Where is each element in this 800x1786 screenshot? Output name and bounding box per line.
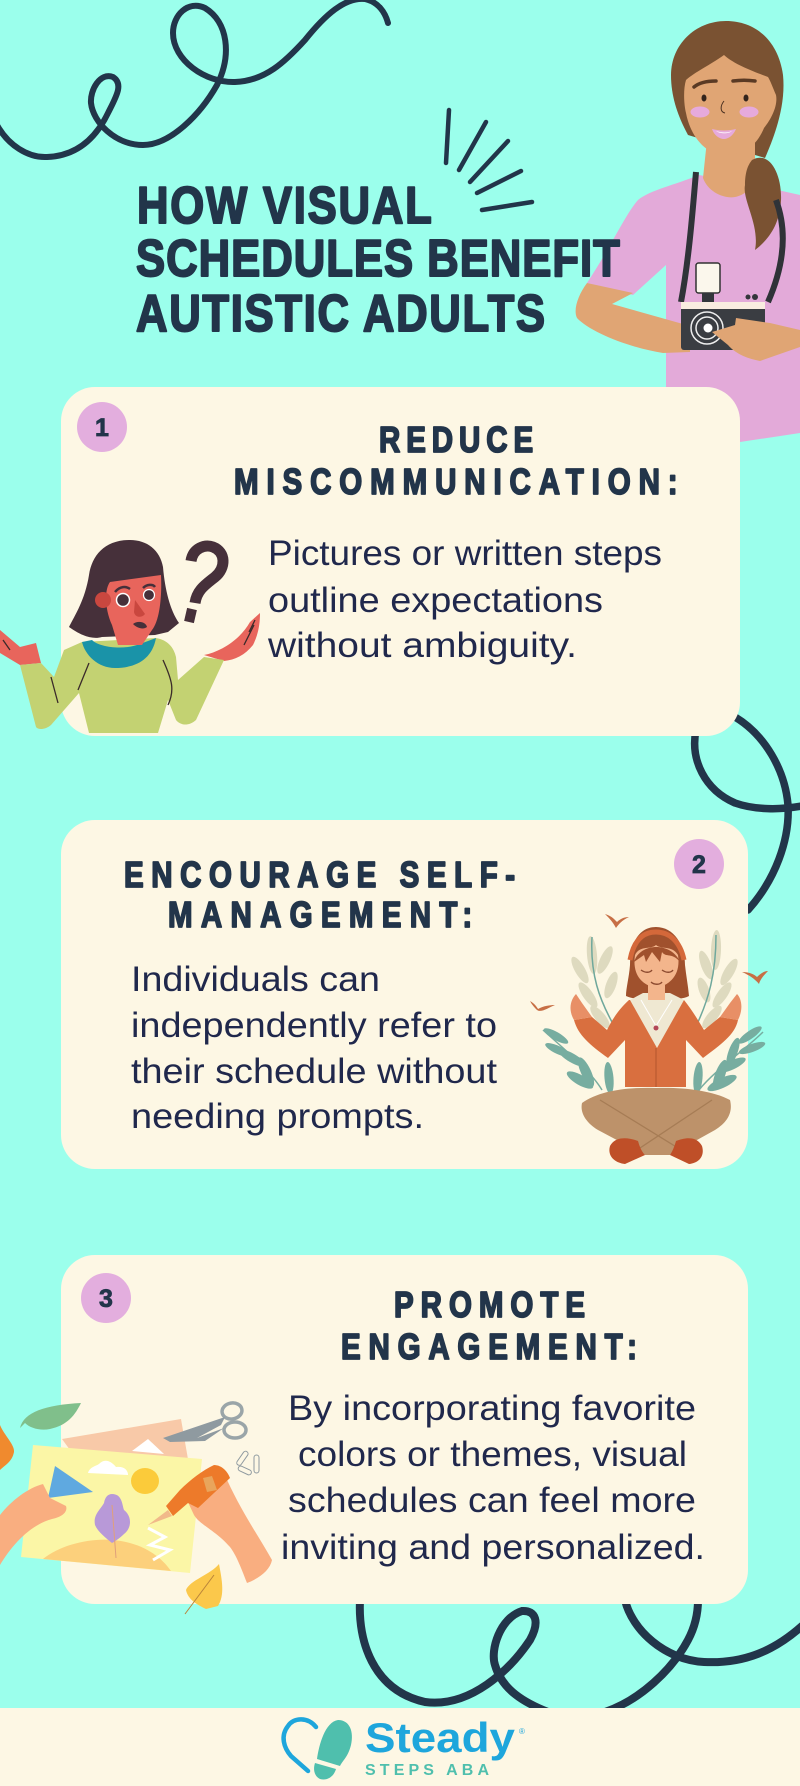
neck and face: [106, 575, 161, 645]
camera body: [681, 302, 765, 350]
face: [634, 945, 678, 988]
purple leaf: [95, 1494, 130, 1543]
logo tagline: STEPS ABA: [365, 1762, 489, 1779]
registered mark: ®: [519, 1727, 525, 1736]
title: AUTISTIC ADULTS: [136, 286, 545, 343]
hair back: [671, 21, 784, 158]
right hand: [186, 1473, 272, 1583]
hair: [69, 540, 179, 638]
heading: [234, 419, 678, 502]
number badge 3: 3: [99, 1285, 113, 1313]
left hand: [0, 1484, 66, 1565]
cloud: [88, 1461, 128, 1475]
blue triangle: [48, 1466, 93, 1498]
heading: MANAGEMENT:: [168, 894, 472, 935]
decorative squiggle: bottom: [360, 1600, 800, 1712]
body text: [281, 1389, 705, 1567]
illustration: hands crafting a collage: [0, 1401, 272, 1614]
yellow paper: [21, 1445, 202, 1573]
nose and mouth: [134, 600, 145, 617]
cardigan and arms: [574, 1000, 738, 1087]
body text: schedules can feel more: [288, 1481, 696, 1520]
teal leaves: [542, 1024, 767, 1094]
necklace: [641, 1000, 672, 1026]
illustration: woman with camera: [576, 21, 800, 442]
paperclips: [236, 1450, 259, 1476]
heading: PROMOTE: [394, 1284, 585, 1325]
beige leaves right: [695, 930, 741, 1031]
straps: [681, 172, 783, 302]
trousers: [582, 1088, 731, 1155]
hill: [43, 1540, 171, 1571]
neck: [703, 140, 755, 197]
body text: their schedule without: [131, 1052, 497, 1091]
logo wordmark: Steady: [365, 1714, 516, 1761]
panel: reduce miscommunication: [61, 387, 740, 736]
body text: inviting and personalized.: [281, 1528, 705, 1567]
left arm: [576, 283, 690, 353]
hands: [570, 994, 741, 1020]
heading: [124, 854, 515, 935]
number badge 3: [81, 1273, 131, 1323]
scissors: [221, 1401, 246, 1438]
heading: [341, 1284, 637, 1367]
green leaf: [20, 1403, 81, 1430]
body text: [267, 534, 662, 665]
footer band: [0, 1708, 800, 1786]
panel: encourage self-management: [61, 820, 748, 1169]
logo: heart and footprint: [284, 1719, 352, 1779]
sun: [131, 1468, 159, 1494]
headband: [630, 932, 684, 960]
orange leaf: [0, 1425, 14, 1470]
title: [136, 178, 620, 343]
number badge 1: 1: [95, 414, 109, 442]
blouse: [630, 993, 684, 1048]
hair: [626, 927, 689, 999]
face: [684, 55, 776, 155]
heading: ENGAGEMENT:: [341, 1326, 637, 1367]
birds: [605, 914, 629, 928]
body text: Individuals can: [131, 960, 380, 999]
number badge 2: [674, 839, 724, 889]
shirt: [587, 175, 800, 442]
heading: MISCOMMUNICATION:: [234, 461, 678, 502]
illustration: meditating woman: [530, 914, 768, 1164]
facial features: [641, 970, 673, 984]
cardigan line: [655, 1048, 657, 1087]
cheeks: [690, 106, 710, 118]
body text: outline expectations: [268, 581, 603, 620]
number badge 1: [77, 402, 127, 452]
sleeve lines: [51, 660, 172, 705]
body text: [131, 960, 497, 1136]
body text: colors or themes, visual: [298, 1435, 687, 1474]
body text: independently refer to: [131, 1006, 497, 1045]
illustration: confused woman shrugging: [0, 540, 260, 733]
title: SCHEDULES BENEFIT: [136, 231, 620, 288]
beige leaves left: [568, 936, 620, 1031]
icon: burst lines: [446, 110, 532, 210]
heading: REDUCE: [379, 419, 533, 460]
mouth: [712, 129, 736, 139]
squiggle of glue: [148, 1528, 170, 1560]
body text: Pictures or written steps: [268, 534, 662, 573]
body text: needing prompts.: [131, 1097, 424, 1136]
braid: [745, 158, 781, 250]
eyes: [116, 594, 130, 606]
sweater: [20, 638, 224, 733]
yellow leaf: [186, 1564, 222, 1609]
bangs: [634, 947, 680, 962]
shoes: [609, 1138, 645, 1164]
collar: [82, 638, 156, 668]
body text: without ambiguity.: [267, 626, 577, 665]
title: HOW VISUAL: [137, 178, 432, 235]
question mark: [189, 546, 223, 622]
peach paper: [62, 1419, 189, 1465]
right hand: [712, 318, 800, 361]
glue bottle: [166, 1465, 230, 1516]
heading: ENCOURAGE SELF-: [124, 854, 515, 895]
number badge 2: 2: [692, 851, 706, 879]
camera flash: [696, 263, 720, 293]
eyebrows: [694, 80, 755, 87]
hands: [0, 630, 41, 665]
eyes: [702, 94, 706, 102]
decorative squiggle: right: [695, 717, 800, 910]
panel: promote engagement: [61, 1255, 748, 1604]
body text: By incorporating favorite: [288, 1389, 696, 1428]
decorative squiggle: top left: [0, 0, 388, 157]
